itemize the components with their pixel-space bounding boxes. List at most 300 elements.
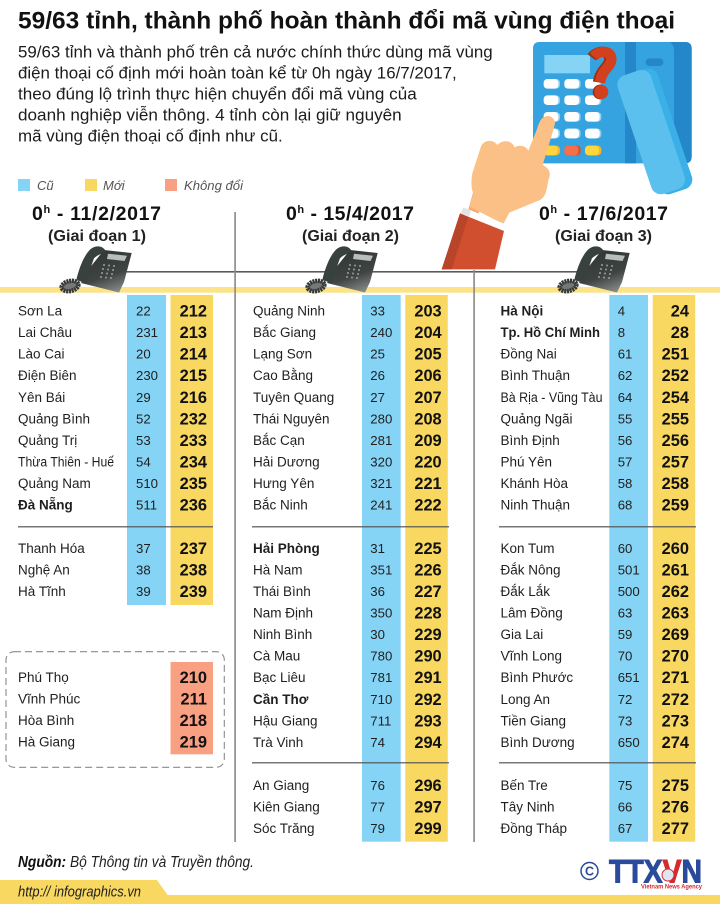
row: Thái Nguyên: Thái Nguyên (253, 411, 330, 426)
row: Lạng Sơn: Lạng Sơn (253, 347, 312, 362)
row: Bình Định: 56 (618, 433, 632, 448)
row: Yên Bái: Yên Bái (18, 390, 65, 405)
row: Cà Mau: Cà Mau (253, 649, 300, 664)
row: Lai Châu: Lai Châu (18, 325, 72, 340)
phase 2 heading: 0 (286, 203, 297, 225)
new code bar (170, 295, 213, 605)
row: Đồng Nai: 251 (662, 346, 689, 364)
logo: TTXVN (581, 854, 702, 890)
row: Bắc Cạn: Bắc Cạn (253, 433, 305, 448)
row: Lâm Đồng: 63 (618, 606, 632, 620)
row: Kon Tum (500, 540, 689, 558)
row: Bình Thuận: 252 (662, 367, 689, 385)
row: Quảng Nam (18, 475, 207, 493)
row: Lâm Đồng: 263 (662, 604, 689, 622)
row: Quảng Ninh (253, 302, 442, 320)
phase 3 heading: - 17/6/2017 (558, 203, 668, 225)
row: Vĩnh Phúc: Vĩnh Phúc (18, 692, 81, 706)
row: Đồng Nai (500, 346, 689, 364)
row: Ninh Thuận (500, 497, 689, 515)
row: Gia Lai: 269 (662, 626, 689, 644)
row: Điện Biên: 215 (180, 367, 207, 385)
row: Đà Nẵng: Đà Nẵng (18, 498, 73, 513)
row: Kon Tum: 60 (618, 541, 632, 556)
row: Lào Cai: 20 (136, 347, 151, 362)
illustration: telephone with pointing hand (442, 42, 695, 269)
row: Đà Nẵng (18, 497, 207, 515)
row: Sóc Trăng: 299 (414, 820, 442, 838)
row: Nghệ An: 38 (136, 562, 151, 577)
row: Hải Dương (253, 454, 442, 472)
row: Lạng Sơn: 205 (414, 346, 442, 364)
row: Lào Cai: Lào Cai (18, 347, 65, 362)
row: Phú Thọ: Phú Thọ (18, 670, 69, 685)
row: Ninh Thuận: Ninh Thuận (500, 498, 570, 513)
row: Bắc Cạn (253, 432, 442, 450)
row: Kon Tum: 260 (662, 540, 689, 558)
legend: unchanged: Không đổi (184, 178, 244, 193)
row: Bắc Giang: 240 (370, 325, 392, 340)
row: Quảng Bình: 52 (136, 411, 151, 426)
old code bar (362, 295, 401, 842)
row: Kiên Giang (253, 798, 442, 816)
row: Sóc Trăng: 79 (370, 821, 385, 836)
icon: handset (615, 66, 695, 197)
phase 1 heading (32, 203, 161, 245)
row: Đồng Tháp: 277 (662, 820, 689, 838)
row: Lâm Đồng: Lâm Đồng (500, 606, 563, 620)
legend: old code (18, 178, 54, 193)
row: Hà Nam: 226 (414, 561, 442, 579)
row: Tây Ninh: Tây Ninh (500, 799, 555, 814)
new code bar (653, 295, 695, 842)
legend: old code: Cũ (37, 178, 54, 193)
row: Đắk Nông: 261 (662, 561, 689, 579)
row: Quảng Bình: Quảng Bình (18, 411, 90, 426)
intro paragraph (18, 42, 493, 145)
row: Sơn La: Sơn La (18, 304, 63, 318)
row: An Giang: 76 (370, 778, 385, 793)
row: Quảng Bình: 232 (180, 410, 207, 428)
panel: unchanged codes (6, 652, 224, 767)
row: Phú Yên: 57 (618, 454, 632, 470)
row: Quảng Ngãi: 255 (662, 410, 689, 428)
row: Phú Yên (500, 454, 689, 472)
row: Hải Dương: 320 (370, 454, 392, 470)
row: Ninh Bình: 229 (414, 626, 442, 644)
intro paragraph: 59/63 tỉnh và thành phố trên cả nước chính thức dùng mã vùng (18, 42, 493, 61)
row: Quảng Bình (18, 410, 207, 428)
row: Thanh Hóa (18, 540, 207, 558)
row: Hà Tĩnh: Hà Tĩnh (18, 584, 66, 599)
icon: desk phone (61, 246, 132, 293)
icon: question mark (592, 52, 611, 99)
row: Yên Bái (18, 389, 207, 407)
phase 3 heading: 0 (539, 203, 550, 225)
row: Tây Ninh (500, 798, 689, 816)
row: Vĩnh Long: 70 (618, 649, 632, 664)
row: An Giang: An Giang (253, 778, 309, 793)
row: Hòa Bình (18, 712, 207, 730)
row: Hải Phòng: 225 (414, 540, 442, 558)
old code bar (609, 295, 648, 842)
row: Bến Tre (500, 777, 689, 795)
row: An Giang (253, 777, 442, 795)
row: Hà Tĩnh: 239 (180, 583, 207, 601)
row: Hà Nội (500, 302, 690, 320)
row: Vĩnh Long (500, 648, 689, 666)
row: Tây Ninh: 66 (618, 799, 632, 814)
icon: keypad telephone (533, 42, 692, 163)
row: Trà Vinh (253, 734, 443, 752)
row: Trà Vinh: 74 (370, 735, 385, 750)
row: Bình Phước: 651 (618, 670, 640, 685)
legend (18, 178, 244, 193)
row: Hải Phòng (253, 540, 442, 558)
row: Bình Phước: Bình Phước (500, 670, 573, 685)
row: Bà Rịa - Vũng Tàu: 254 (662, 389, 690, 407)
row: Sơn La: 22 (136, 304, 151, 318)
source note: Nguồn: Bộ Thông tin và Truyền thông. (18, 854, 254, 871)
row: Kon Tum: Kon Tum (500, 541, 555, 556)
row: Bình Định: 256 (662, 432, 689, 450)
row: Nam Định: Nam Định (253, 606, 313, 620)
row: Tây Ninh: 276 (662, 798, 689, 816)
row: Hà Nam: Hà Nam (253, 562, 303, 577)
icon: pointing hand (442, 116, 555, 269)
row: Yên Bái: 216 (180, 389, 207, 407)
row: Trà Vinh: Trà Vinh (253, 735, 303, 750)
row: Kiên Giang: 77 (370, 799, 385, 814)
row: Sóc Trăng: Sóc Trăng (253, 821, 315, 836)
row: Đồng Tháp: Đồng Tháp (500, 821, 567, 836)
row: Bà Rịa - Vũng Tàu: Bà Rịa - Vũng Tàu (500, 390, 602, 405)
row: Hà Giang (18, 734, 207, 752)
row: Long An: Long An (500, 692, 550, 707)
divider between phase 2 and phase 3 (473, 270, 475, 842)
row: Phú Thọ: 210 (180, 669, 207, 687)
row: Cà Mau: 780 (370, 649, 392, 664)
row: Lạng Sơn: 25 (370, 347, 385, 362)
row: Bà Rịa - Vũng Tàu: 64 (618, 390, 632, 405)
row: Phú Thọ (18, 669, 207, 687)
row: Đắk Nông (500, 561, 689, 579)
row: Tp. Hồ Chí Minh (500, 324, 689, 342)
row: Bình Dương (500, 734, 690, 752)
row: Cao Bằng (253, 367, 442, 385)
row: Quảng Nam: 235 (180, 475, 207, 493)
row: Đồng Tháp: 67 (618, 821, 632, 836)
row: Lai Châu: 213 (180, 324, 207, 342)
row: Khánh Hòa (500, 475, 689, 493)
row: Bạc Liêu: Bạc Liêu (253, 670, 306, 685)
row: Đà Nẵng: 511 (136, 498, 157, 513)
row: Hà Tĩnh (18, 583, 207, 601)
row: Thanh Hóa: Thanh Hóa (18, 541, 85, 556)
old code bar (127, 295, 166, 605)
row: Hòa Bình: 218 (180, 712, 207, 730)
row: Gia Lai: Gia Lai (500, 627, 543, 642)
row: Nghệ An: 238 (180, 561, 207, 579)
row: Đắk Nông: 501 (618, 562, 640, 577)
row: Gia Lai (500, 626, 689, 644)
phase 1 heading: h (43, 204, 50, 216)
row: Điện Biên: Điện Biên (18, 368, 77, 383)
row: Cần Thơ (253, 691, 442, 709)
row: Lào Cai (18, 346, 208, 364)
row: Bắc Cạn: 281 (370, 433, 392, 448)
row: Bắc Giang: 204 (414, 324, 443, 342)
row: Điện Biên: 230 (136, 368, 158, 383)
row: Thái Bình: 36 (370, 584, 385, 599)
row: Bạc Liêu: 291 (414, 669, 442, 687)
row: Nghệ An: Nghệ An (18, 562, 70, 577)
row: Đà Nẵng: 236 (180, 497, 207, 515)
row: Hà Nam: 351 (370, 562, 392, 577)
row: Nghệ An (18, 561, 207, 579)
row: Cần Thơ: 292 (414, 691, 442, 709)
row: Bắc Giang: Bắc Giang (253, 325, 316, 340)
row: Tp. Hồ Chí Minh: 8 (618, 325, 625, 340)
row: Bắc Giang (253, 324, 443, 342)
phase 1 heading: (Giai đoạn 1) (48, 228, 146, 245)
row: Lâm Đồng (500, 604, 689, 622)
row: Vĩnh Long: Vĩnh Long (500, 649, 562, 664)
phase 2 heading: h (297, 204, 304, 216)
row: Quảng Ngãi: 55 (618, 411, 632, 426)
row: Đồng Tháp (500, 820, 689, 838)
row: Nam Định: 228 (414, 604, 442, 622)
row: Quảng Trị: 53 (136, 433, 151, 448)
row: Tuyên Quang: 207 (414, 389, 442, 407)
row: Khánh Hòa: Khánh Hòa (500, 476, 569, 491)
row: Quảng Trị (18, 432, 207, 450)
row: Bình Dương: Bình Dương (500, 735, 575, 750)
row: Bình Định: Bình Định (500, 433, 560, 448)
row: Lạng Sơn (253, 346, 442, 364)
row: Kiên Giang: Kiên Giang (253, 799, 320, 814)
phase 3 heading: (Giai đoạn 3) (555, 228, 652, 245)
row: Hải Dương: Hải Dương (253, 454, 320, 470)
row: Khánh Hòa: 258 (662, 475, 689, 493)
row: Đồng Nai: Đồng Nai (500, 347, 557, 362)
row: Bắc Ninh: 241 (370, 498, 392, 513)
row: Thái Nguyên: 280 (370, 411, 392, 426)
row: Hậu Giang: 293 (414, 712, 442, 730)
row: Bình Phước: 271 (662, 669, 689, 687)
row: Long An: 272 (662, 691, 689, 709)
row: Điện Biên (18, 367, 207, 385)
row: Quảng Ngãi (500, 410, 689, 428)
row: Gia Lai: 59 (618, 627, 632, 642)
intro paragraph: mã vùng điện thoại cố định như cũ. (18, 126, 283, 145)
row: Hậu Giang: Hậu Giang (253, 713, 318, 728)
row: Đắk Lắk: 262 (662, 583, 689, 601)
row: Vĩnh Long: 270 (662, 648, 689, 666)
row: Hưng Yên: Hưng Yên (253, 476, 314, 491)
row: Hòa Bình: Hòa Bình (18, 713, 74, 728)
row: Quảng Ninh: 203 (414, 302, 442, 320)
row: Hà Nam (253, 561, 442, 579)
row: Thừa Thiên - Huế (18, 454, 208, 472)
intro paragraph: theo đúng lộ trình thực hiện chuyển đổi mã vùng của (18, 84, 417, 103)
legend: new code (85, 178, 126, 193)
globe emblem (662, 869, 674, 881)
row: Hưng Yên (253, 475, 442, 493)
phase 1 heading: 0 (32, 203, 43, 225)
row: Bến Tre: Bến Tre (500, 778, 548, 793)
icon: desk phone (307, 246, 378, 293)
row: Sơn La: 212 (180, 302, 207, 320)
row: Bình Phước (500, 669, 689, 687)
legend: new code: Mới (103, 178, 126, 193)
phase 2 heading: - 15/4/2017 (305, 203, 414, 225)
row: Hậu Giang: 711 (370, 713, 391, 728)
divider between phase 1 and phase 2 (234, 212, 236, 842)
row: Cà Mau: 290 (414, 648, 442, 666)
row: Tuyên Quang (253, 389, 442, 407)
row: Nam Định (253, 604, 442, 622)
row: Đắk Nông: Đắk Nông (500, 562, 561, 577)
row: Thái Nguyên (253, 410, 442, 428)
row: Lào Cai: 214 (180, 346, 208, 364)
row: Bạc Liêu (253, 669, 442, 687)
row: Lai Châu: 231 (136, 325, 158, 340)
footer band with url tab (0, 880, 720, 904)
row: Ninh Thuận: 259 (662, 497, 689, 515)
row: Tiền Giang (500, 712, 689, 730)
row: Thừa Thiên - Huế: Thừa Thiên - Huế (18, 454, 114, 470)
agency wordmark: TTXVN (609, 854, 702, 890)
row: Cao Bằng: 26 (370, 368, 385, 383)
copyright mark: C (585, 864, 594, 878)
row: Ninh Bình: 30 (370, 627, 385, 642)
row: Sóc Trăng (253, 820, 442, 838)
row: Thừa Thiên - Huế: 234 (180, 454, 208, 472)
row: Thái Bình: Thái Bình (253, 584, 311, 599)
row: Cần Thơ: Cần Thơ (253, 692, 309, 707)
row: Hưng Yên: 321 (370, 476, 392, 491)
row: Quảng Ngãi: Quảng Ngãi (500, 411, 573, 426)
row: Thái Bình: 227 (414, 583, 442, 601)
row: Bạc Liêu: 781 (370, 670, 392, 685)
phase 2 heading (286, 203, 414, 245)
unchanged code bar (170, 662, 213, 754)
row: Ninh Thuận: 68 (618, 498, 632, 513)
row: Tuyên Quang: Tuyên Quang (253, 390, 334, 405)
row: Quảng Nam: Quảng Nam (18, 476, 91, 491)
icon: desk phone (559, 246, 630, 293)
row: Long An (500, 691, 689, 709)
intro paragraph: doanh nghiệp viễn thông. 4 tỉnh còn lại giữ nguyên (18, 105, 402, 124)
row: Ninh Bình: Ninh Bình (253, 627, 312, 642)
yellow timeline band (0, 287, 720, 293)
phase 1 heading: - 11/2/2017 (51, 203, 161, 225)
row: Quảng Nam: 510 (136, 476, 158, 491)
row: Quảng Ninh: Quảng Ninh (253, 304, 325, 318)
row: Đắk Lắk: Đắk Lắk (500, 584, 550, 599)
row: Quảng Ninh: 33 (370, 304, 385, 318)
row: Vĩnh Phúc (18, 690, 207, 708)
row: Bình Định (500, 432, 689, 450)
row: Bình Thuận: 62 (618, 368, 632, 383)
row: Sơn La (18, 302, 207, 320)
row: Quảng Trị: 233 (180, 432, 207, 450)
row: Hà Giang: Hà Giang (18, 735, 75, 750)
row: Đắk Lắk (500, 583, 689, 601)
row: Thanh Hóa: 37 (136, 541, 151, 556)
website url: http:// infographics.vn (18, 884, 141, 900)
row: Hải Dương: 220 (414, 454, 442, 472)
row: Cà Mau (253, 648, 442, 666)
phase 3 heading: h (550, 204, 557, 216)
row: Tiền Giang: 73 (618, 713, 632, 728)
row: Hải Phòng: Hải Phòng (253, 541, 320, 556)
panel: phase 2 (252, 203, 449, 842)
row: Hưng Yên: 221 (414, 475, 442, 493)
title: 59/63 tỉnh, thành phố hoàn thành đổi mã vùng điện thoại (18, 8, 675, 34)
row: Tiền Giang: 273 (662, 712, 689, 730)
row: Cần Thơ: 710 (370, 692, 392, 707)
row: Hà Nội: 24 (671, 302, 690, 320)
row: Bà Rịa - Vũng Tàu (500, 389, 690, 407)
row: Hải Phòng: 31 (370, 541, 385, 556)
row: Bến Tre: 275 (662, 777, 689, 795)
row: Hà Nội: 4 (618, 304, 625, 318)
timeline line (125, 271, 605, 273)
row: Bắc Ninh: Bắc Ninh (253, 498, 308, 513)
row: Yên Bái: 29 (136, 390, 151, 405)
row: Cao Bằng: 206 (414, 367, 442, 385)
row: Thái Nguyên: 208 (414, 410, 442, 428)
row: Phú Yên: Phú Yên (500, 454, 552, 470)
row: Đồng Nai: 61 (618, 347, 632, 362)
row: Quảng Trị: Quảng Trị (18, 433, 77, 448)
agency tagline: Vietnam News Agency (641, 884, 702, 890)
row: Bình Dương: 650 (618, 735, 640, 750)
row: Bắc Cạn: 209 (414, 432, 442, 450)
row: Lai Châu (18, 324, 207, 342)
row: Nam Định: 350 (370, 606, 392, 620)
row: Hà Nội: Hà Nội (500, 304, 543, 318)
row: Cao Bằng: Cao Bằng (253, 368, 313, 383)
row: Tp. Hồ Chí Minh: Tp. Hồ Chí Minh (500, 325, 600, 340)
row: Hà Giang: 219 (180, 734, 207, 752)
row: Hậu Giang (253, 712, 442, 730)
row: Khánh Hòa: 58 (618, 476, 632, 491)
intro paragraph: điện thoại cố định mới hoàn toàn kể từ 0h ngày 16/7/2017, (18, 63, 457, 82)
row: Trà Vinh: 294 (414, 734, 443, 752)
phase 2 heading: (Giai đoạn 2) (302, 228, 399, 245)
row: Tuyên Quang: 27 (370, 390, 385, 405)
row: Thừa Thiên - Huế: 54 (136, 454, 151, 470)
row: Bắc Ninh (253, 497, 442, 515)
row: Hà Tĩnh: 39 (136, 584, 151, 599)
row: Bắc Ninh: 222 (414, 497, 442, 515)
panel: phase 1 (18, 203, 213, 605)
row: Ninh Bình (253, 626, 442, 644)
new code bar (405, 295, 448, 842)
row: Long An: 72 (618, 692, 632, 707)
row: Phú Yên: 257 (662, 454, 689, 472)
row: Bình Thuận (500, 367, 689, 385)
row: An Giang: 296 (414, 777, 442, 795)
row: Vĩnh Phúc: 211 (181, 690, 207, 708)
row: Bình Dương: 274 (662, 734, 690, 752)
row: Thái Bình (253, 583, 442, 601)
row: Thanh Hóa: 237 (180, 540, 207, 558)
row: Tiền Giang: Tiền Giang (500, 713, 566, 728)
